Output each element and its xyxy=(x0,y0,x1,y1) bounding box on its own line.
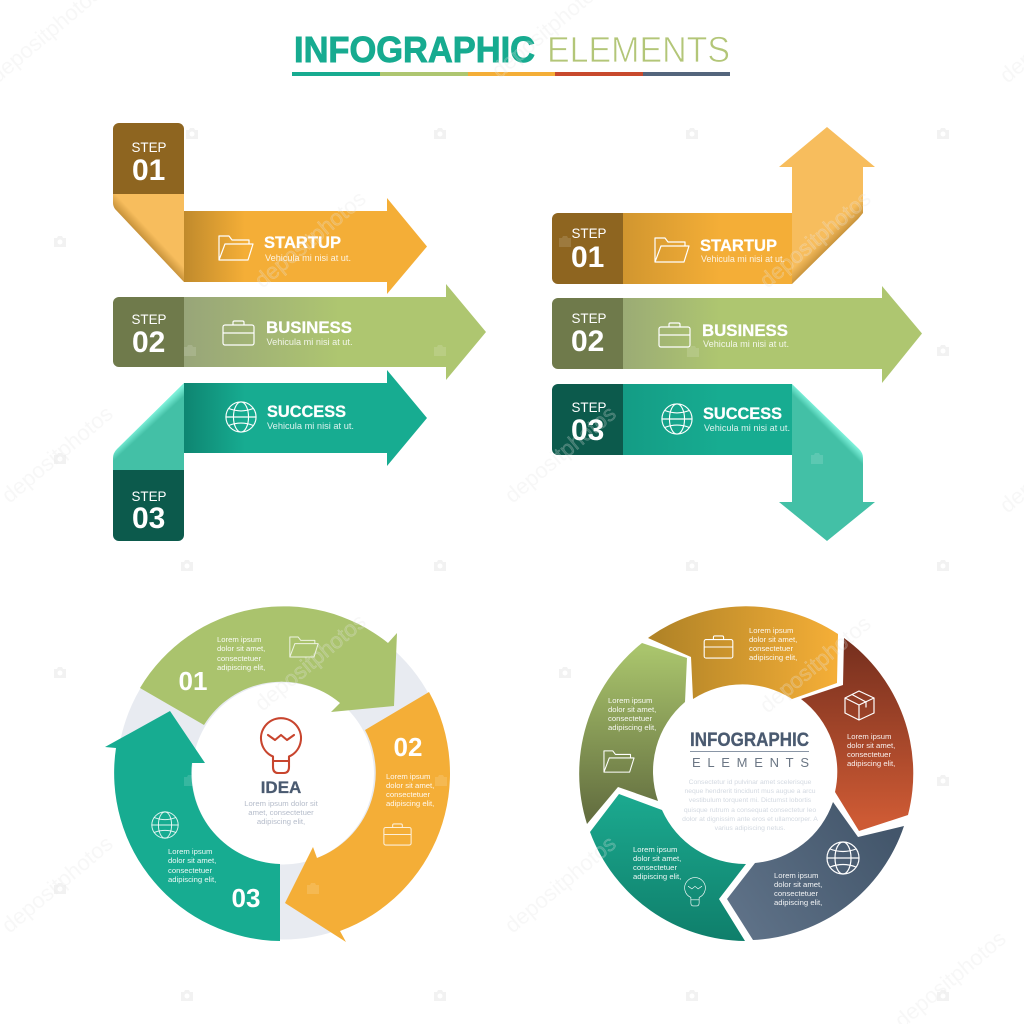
segment gold xyxy=(648,606,838,699)
step 03 arrow with down fold: SUCCESS xyxy=(703,404,782,423)
idea text: adipiscing elit, xyxy=(257,817,305,826)
title colour bar xyxy=(292,72,730,76)
segment gold: consectetuer xyxy=(749,644,793,653)
watermark camera marks over shapes xyxy=(184,236,823,894)
icon: folder xyxy=(604,751,634,772)
segment 03 teal: consectetuer xyxy=(168,866,212,875)
segment green: consectetuer xyxy=(608,714,652,723)
watermark: depositphotos xyxy=(0,401,118,508)
segment 01 green xyxy=(140,606,397,725)
icon: bulb xyxy=(685,878,705,906)
step 01 arrow: STEP xyxy=(132,139,166,155)
idea heading: IDEA xyxy=(261,778,301,797)
icon: globe xyxy=(662,404,692,434)
icon: folder xyxy=(655,238,689,262)
step 03 arrow with down fold: 03 xyxy=(571,414,604,447)
step 03 arrow with down fold: Vehicula mi nisi at ut. xyxy=(704,423,790,434)
segment red xyxy=(801,638,913,831)
step 02 arrow: BUSINESS xyxy=(266,318,352,337)
panel: three-arrow cycle xyxy=(105,606,450,942)
segment 02 orange: Lorem ipsum xyxy=(386,772,430,781)
segment 03 teal: dolor sit amet, xyxy=(168,856,216,865)
step 03 arrow with down fold xyxy=(552,384,875,541)
step 03 arrow: SUCCESS xyxy=(267,402,346,421)
icon: briefcase xyxy=(223,321,254,345)
segment slate: adipiscing elit, xyxy=(774,898,822,907)
watermark: depositphotos xyxy=(0,831,118,938)
step 02 arrow: STEP xyxy=(572,310,606,326)
step 01 arrow with up fold: STEP xyxy=(572,225,606,241)
watermark camera marks xyxy=(54,128,949,1001)
step 02 arrow: Vehicula mi nisi at ut. xyxy=(266,337,352,348)
segment 01 green: consectetuer xyxy=(217,654,261,663)
centre text: vestibulum torquent mi. Dictumst lobortis xyxy=(689,797,812,804)
step 03 arrow: Vehicula mi nisi at ut. xyxy=(267,421,354,432)
centre text: neque hendrerit tincidunt mus augue a arcu xyxy=(684,788,816,795)
title: INFOGRAPHIC xyxy=(294,29,535,70)
step 02 arrow: 02 xyxy=(571,325,604,358)
title xyxy=(294,29,730,70)
segment red: dolor sit amet, xyxy=(847,741,895,750)
watermark: depositphotos xyxy=(500,831,621,938)
step 01 arrow: STARTUP xyxy=(264,233,341,252)
segment green: dolor sit amet, xyxy=(608,705,656,714)
segment slate xyxy=(727,802,904,940)
segment 01 green: Lorem ipsum xyxy=(217,635,261,644)
segment gold: adipiscing elit, xyxy=(749,653,797,662)
segment 03 teal: 03 xyxy=(232,883,260,913)
step 01 arrow with up fold: STARTUP xyxy=(700,236,777,255)
segment teal: adipiscing elit, xyxy=(633,872,681,881)
segment teal xyxy=(590,794,746,941)
step 01 arrow xyxy=(113,123,427,294)
step 03 arrow with down fold: STEP xyxy=(572,399,606,415)
segment 02 orange: 02 xyxy=(394,732,422,762)
centre text: dolor at dignissim ante eros et ullamcorper. A xyxy=(682,816,818,823)
icon: folder xyxy=(290,637,318,657)
segment slate: dolor sit amet, xyxy=(774,880,822,889)
segment teal: dolor sit amet, xyxy=(633,854,681,863)
segment green: adipiscing elit, xyxy=(608,723,656,732)
segment green: Lorem ipsum xyxy=(608,696,652,705)
icon: briefcase xyxy=(659,323,690,347)
watermark: depositphotos xyxy=(250,609,371,716)
watermark: depositphotos xyxy=(755,186,876,293)
panel: left step arrows xyxy=(113,123,486,541)
segment 02 orange: adipiscing elit, xyxy=(386,799,434,808)
segment 01 green: dolor sit amet, xyxy=(217,644,265,653)
step 01 arrow: 01 xyxy=(132,154,165,187)
step 03 arrow: 03 xyxy=(132,502,165,535)
segment slate: consectetuer xyxy=(774,889,818,898)
segment red: Lorem ipsum xyxy=(847,732,891,741)
step 02 arrow: BUSINESS xyxy=(702,321,788,340)
step 02 arrow: STEP xyxy=(132,311,166,327)
step 02 arrow: Vehicula mi nisi at ut. xyxy=(703,339,789,350)
step 01 arrow with up fold xyxy=(552,127,875,284)
segment 02 orange: consectetuer xyxy=(386,790,430,799)
segment 02 orange xyxy=(285,692,450,942)
icon: globe xyxy=(226,402,256,432)
segment 03 teal: adipiscing elit, xyxy=(168,875,216,884)
watermark: depositphotos xyxy=(250,186,371,293)
step 03 arrow xyxy=(113,370,427,541)
icon: globe xyxy=(827,842,859,874)
centre text: Consectetur id pulvinar amet scelerisque xyxy=(689,779,812,786)
step 03 arrow: STEP xyxy=(132,488,166,504)
segment gold: dolor sit amet, xyxy=(749,635,797,644)
title: ELEMENTS xyxy=(547,29,730,70)
segment 03 teal xyxy=(105,711,280,941)
icon: globe xyxy=(152,812,178,838)
segment teal: Lorem ipsum xyxy=(633,845,677,854)
centre heading: ELEMENTS xyxy=(692,755,809,770)
centre text: quisque rutrum a consequat consectetur leo xyxy=(684,807,816,814)
watermark: depositphotos xyxy=(500,401,621,508)
step 02 arrow: 02 xyxy=(132,326,165,359)
idea text: amet, consectetuer xyxy=(248,808,314,817)
centre heading: INFOGRAPHIC xyxy=(690,730,809,751)
segment slate: Lorem ipsum xyxy=(774,871,818,880)
panel: five-segment cycle xyxy=(579,606,913,941)
step 01 arrow with up fold: Vehicula mi nisi at ut. xyxy=(701,254,785,265)
icon: briefcase xyxy=(704,636,733,658)
step 01 arrow with up fold: 01 xyxy=(571,241,604,274)
segment teal: consectetuer xyxy=(633,863,677,872)
centre text: varius adipiscing netus. xyxy=(715,825,785,832)
segment 03 teal: Lorem ipsum xyxy=(168,847,212,856)
segment green xyxy=(579,643,687,824)
segment 01 green: 01 xyxy=(179,666,207,696)
step 02 arrow xyxy=(552,286,922,383)
segment gold: Lorem ipsum xyxy=(749,626,793,635)
icon: folder xyxy=(219,236,253,260)
step 02 arrow xyxy=(113,284,486,380)
panel: right step arrows xyxy=(552,127,922,541)
idea text: Lorem ipsum dolor sit xyxy=(244,799,319,808)
segment 02 orange: dolor sit amet, xyxy=(386,781,434,790)
centre heading xyxy=(690,730,809,770)
icon: briefcase xyxy=(384,824,411,845)
icon: light bulb xyxy=(261,718,301,773)
watermark: depositphotos xyxy=(755,611,876,718)
icon: box xyxy=(845,691,874,720)
segment red: consectetuer xyxy=(847,750,891,759)
segment 01 green: adipiscing elit, xyxy=(217,663,265,672)
step 01 arrow: Vehicula mi nisi at ut. xyxy=(265,253,351,264)
segment red: adipiscing elit, xyxy=(847,759,895,768)
